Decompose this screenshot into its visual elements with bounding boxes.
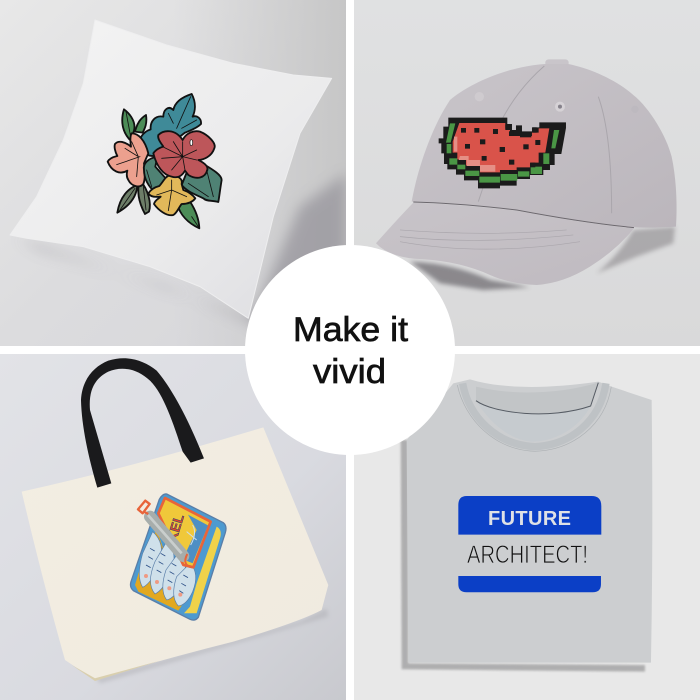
sardine can print <box>130 494 226 620</box>
badge circle <box>245 245 455 455</box>
name tag footer <box>458 576 601 592</box>
t-shirt collar <box>463 383 606 447</box>
floral print <box>108 94 222 228</box>
heading: Make it <box>293 311 409 349</box>
tote base fold <box>72 661 160 681</box>
watermelon flesh <box>453 123 549 172</box>
panel: grey t-shirt with name tag print <box>354 354 700 700</box>
tote handle <box>81 358 204 488</box>
monstera leaf <box>139 94 201 156</box>
panel: baseball cap with watermelon print <box>354 0 700 346</box>
flower: red hibiscus <box>153 131 215 178</box>
leaf: olive lower left <box>117 185 137 213</box>
watermelon rind <box>446 123 559 183</box>
tote shadow <box>97 608 328 683</box>
can key <box>138 501 150 514</box>
cap shadow <box>410 227 675 290</box>
hibiscus highlight <box>190 140 193 146</box>
leaf: green upper small <box>135 115 146 133</box>
can lid blue label <box>186 514 208 564</box>
cap brim <box>376 203 634 285</box>
rolled lid <box>150 517 183 556</box>
watermelon print <box>439 118 566 188</box>
leaf: green bottom <box>177 202 199 228</box>
can lettering: KEL <box>164 512 187 544</box>
leaf: dark green right <box>182 164 222 202</box>
t-shirt body <box>407 379 652 663</box>
cap seams and eyelets <box>400 66 634 249</box>
tote body <box>22 427 328 680</box>
leaf: green upper left <box>122 109 134 141</box>
watermelon outline <box>439 118 566 188</box>
watermelon seeds <box>461 125 540 167</box>
name tag header <box>458 496 601 535</box>
flower veins <box>117 97 213 227</box>
flower: yellow <box>148 175 195 215</box>
pillow <box>10 20 332 318</box>
heading: vivid <box>313 353 386 391</box>
text: ARCHITECT!: ARCHITECT! <box>467 541 588 569</box>
can yellow rim <box>184 527 221 613</box>
sardines <box>139 532 196 606</box>
panel: pillow with floral print <box>0 0 347 346</box>
cap button <box>545 59 569 67</box>
leaf: olive lower middle <box>138 180 150 214</box>
pillow shadow <box>17 173 347 327</box>
can lid frame <box>158 498 211 567</box>
text: FUTURE: FUTURE <box>488 508 571 530</box>
t-shirt shadow <box>401 440 645 672</box>
centre badge <box>245 245 455 455</box>
panel: tote bag with sardine can print <box>0 354 346 700</box>
t-shirt inner neck <box>476 401 591 442</box>
can body <box>130 494 226 620</box>
cap crown <box>412 64 677 228</box>
flower: pink <box>108 133 148 186</box>
leaf: dark green left <box>144 157 166 192</box>
